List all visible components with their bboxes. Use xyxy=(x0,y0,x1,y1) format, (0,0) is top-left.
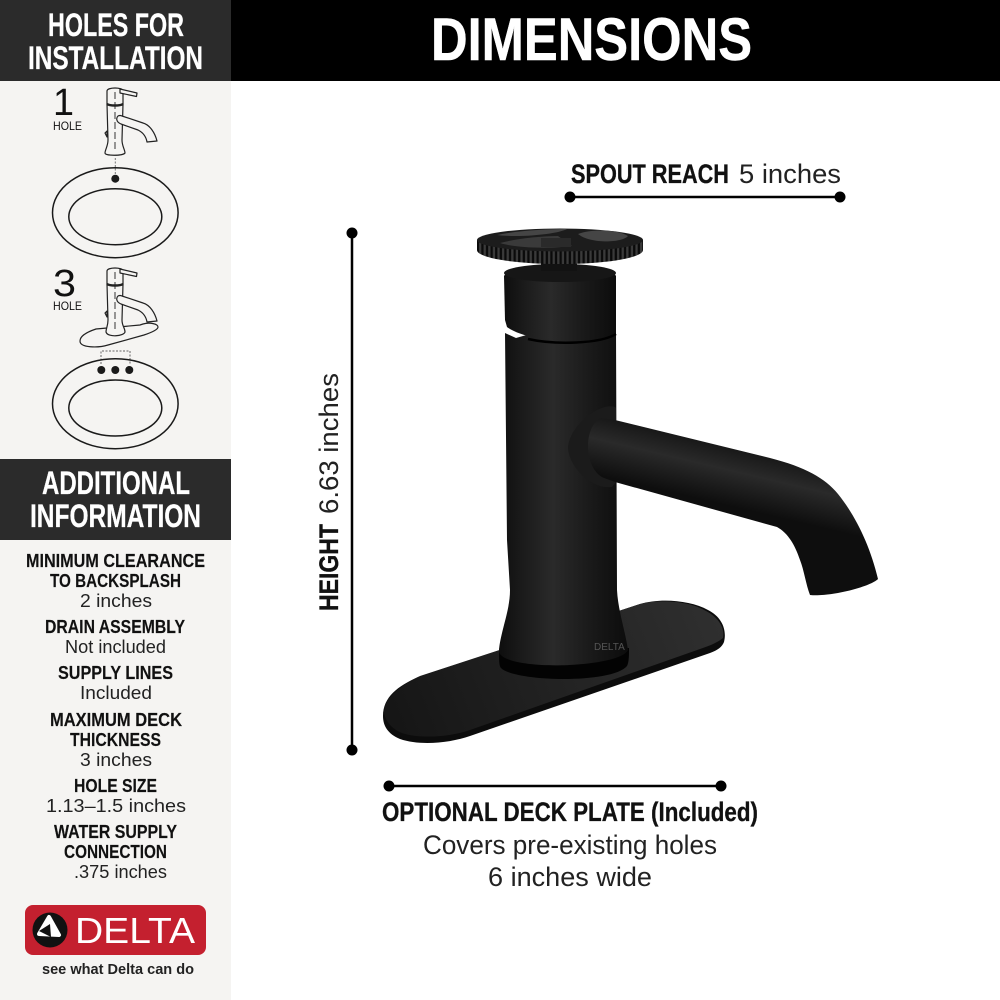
label: 3 hole xyxy=(53,263,82,313)
panel: left sidebar xyxy=(0,0,231,1000)
icon: faucet line drawing xyxy=(105,88,157,155)
text block: additional information specs: Included xyxy=(80,682,152,703)
spout xyxy=(568,406,878,595)
text block: additional information specs: SUPPLY LINES xyxy=(58,663,173,683)
dimension: spout reach: SPOUT REACH xyxy=(571,159,729,189)
text block: additional information specs: MAXIMUM DECK xyxy=(50,710,182,730)
logo: Delta: DELTA xyxy=(75,910,195,951)
diagram: one hole installation xyxy=(53,82,178,258)
text block: additional information specs: .375 inches xyxy=(74,861,167,882)
icon: delta circle xyxy=(32,912,68,948)
image: matte black faucet xyxy=(383,228,878,743)
text block: additional information specs: 3 inches xyxy=(80,749,152,770)
dimension: height: 6.63 inches xyxy=(314,373,344,514)
callout: optional deck plate: 6 inches wide xyxy=(488,862,652,892)
heading: holes for installation: HOLES FOR xyxy=(48,7,184,43)
logo: Delta xyxy=(25,905,206,978)
heading: additional information xyxy=(0,459,231,540)
knurled wheel handle xyxy=(477,228,643,264)
text block: additional information specs: CONNECTION xyxy=(64,842,167,862)
icon: faucet line drawing xyxy=(105,268,157,336)
text block: additional information specs: MINIMUM CLEARANCE xyxy=(26,551,205,571)
label: 3 hole: HOLE xyxy=(53,299,82,313)
text block: additional information specs: 1.13–1.5 inches xyxy=(46,795,186,816)
label: 1 hole xyxy=(53,82,82,133)
icon: sink with one hole xyxy=(53,168,178,258)
heading: dimensions: DIMENSIONS xyxy=(431,6,752,73)
dimension: spout reach: 5 inches xyxy=(739,159,841,189)
logo: Delta: see what Delta can do xyxy=(42,961,194,978)
callout: optional deck plate: OPTIONAL DECK PLATE (Included) xyxy=(382,797,758,827)
label: 1 hole: 1 xyxy=(53,82,74,124)
text block: additional information specs: DRAIN ASSEMBLY xyxy=(45,617,185,637)
text block: additional information specs: TO BACKSPLASH xyxy=(50,571,181,591)
icon: deck plate line drawing xyxy=(80,323,158,347)
diagram: three hole installation xyxy=(53,263,178,449)
label: 3 hole: 3 xyxy=(53,263,76,305)
faucet base and body: DELTA xyxy=(594,642,625,653)
callout: optional deck plate xyxy=(382,780,758,892)
text block: additional information specs: HOLE SIZE xyxy=(74,776,157,796)
callout: optional deck plate: Covers pre-existing holes xyxy=(423,830,717,860)
heading: additional information: ADDITIONAL xyxy=(42,465,190,501)
heading: holes for installation: INSTALLATION xyxy=(28,40,203,76)
dimension: spout reach xyxy=(564,159,846,202)
heading: dimensions xyxy=(231,0,1000,81)
heading: holes for installation xyxy=(0,0,231,81)
faucet cap xyxy=(504,264,616,343)
text block: additional information specs xyxy=(26,551,205,882)
icon: sink with three holes xyxy=(53,359,178,449)
text block: additional information specs: THICKNESS xyxy=(70,730,161,750)
faucet base and body xyxy=(499,330,629,679)
dimension: height xyxy=(314,228,358,756)
heading: additional information: INFORMATION xyxy=(30,498,201,534)
label: 1 hole: HOLE xyxy=(53,119,82,133)
text block: additional information specs: 2 inches xyxy=(80,590,152,611)
text block: additional information specs: WATER SUPPLY xyxy=(54,822,177,842)
dimension: height: HEIGHT xyxy=(314,524,344,611)
text block: additional information specs: Not included xyxy=(65,636,166,657)
deck plate xyxy=(383,601,725,743)
